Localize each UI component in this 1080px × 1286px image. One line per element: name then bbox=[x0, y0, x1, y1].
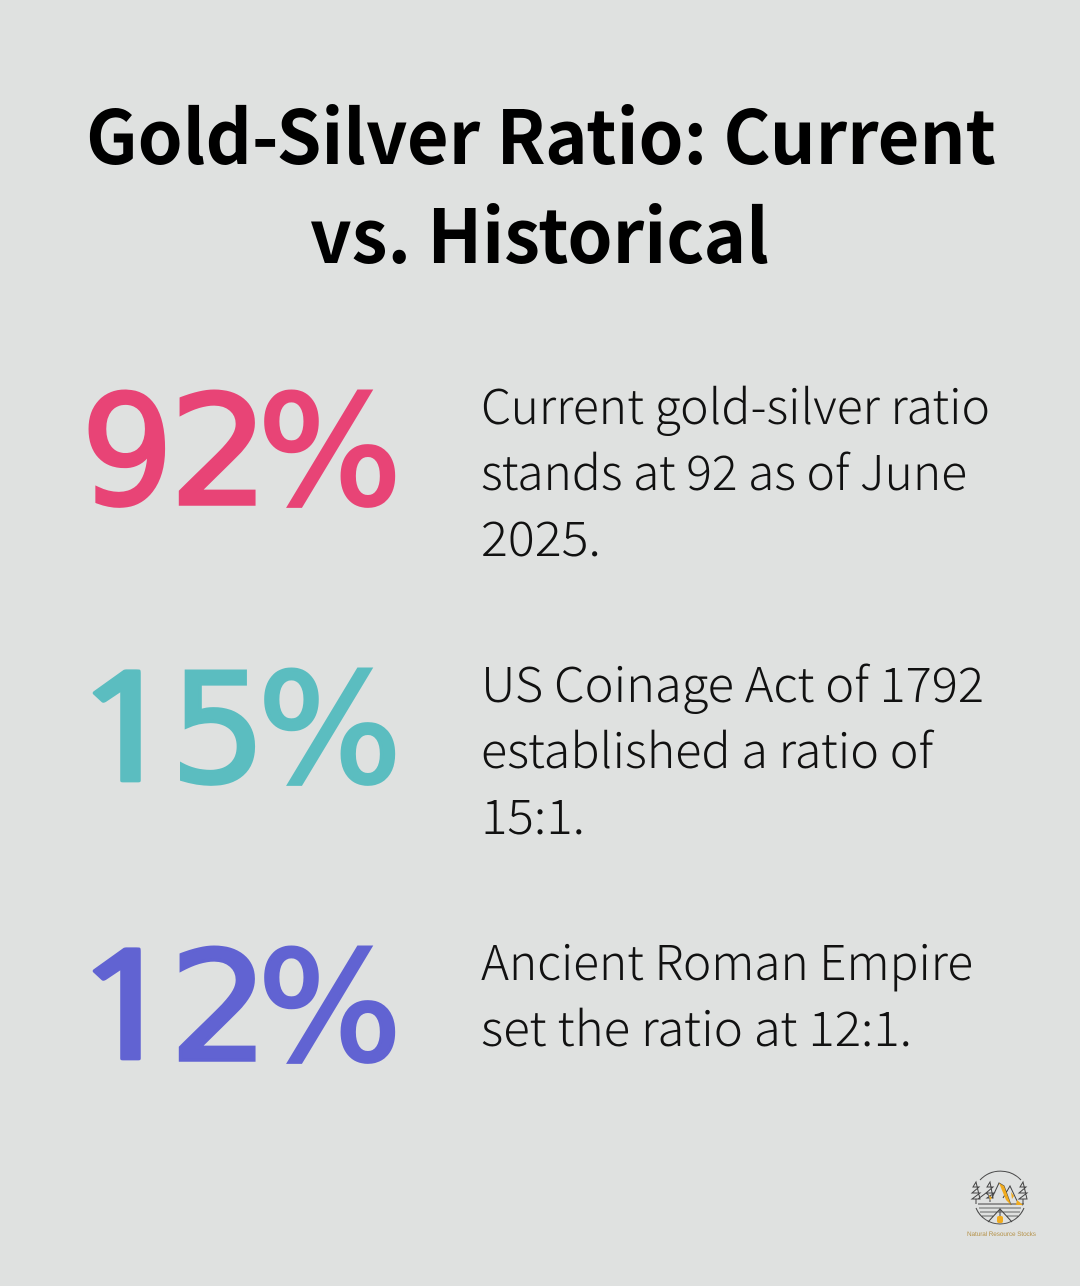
stat: 92%: % bbox=[258, 363, 402, 540]
stat: 15%: 5 bbox=[170, 641, 267, 818]
text: roman empire bbox=[481, 924, 973, 1060]
logo: Natural Resource Stocks: Natural Resource Stocks bbox=[967, 1231, 1036, 1238]
title bbox=[86, 79, 996, 285]
text: coinage act bbox=[481, 646, 984, 848]
stat: 92% bbox=[81, 363, 402, 541]
text: current ratio bbox=[481, 368, 990, 570]
title: Gold-Silver Ratio: Current bbox=[86, 79, 996, 186]
logo: Natural Resource Stocks bbox=[967, 1171, 1036, 1238]
stat: 12%: % bbox=[258, 919, 402, 1096]
text: roman empire: set the ratio at 12:1. bbox=[481, 990, 912, 1060]
stat: 15%: 1 bbox=[68, 657, 184, 805]
stat: 12%: 2 bbox=[169, 919, 270, 1096]
text: current ratio: Current gold-silver ratio bbox=[481, 368, 990, 438]
stat: 92%: 2 bbox=[169, 363, 270, 540]
title: vs. Historical bbox=[310, 178, 769, 285]
text: current ratio: stands at 92 as of June bbox=[481, 434, 967, 504]
stat: 12%: 1 bbox=[68, 935, 184, 1083]
text: coinage act: established a ratio of bbox=[481, 712, 935, 782]
text: current ratio: 2025. bbox=[481, 500, 601, 570]
stat: 12% bbox=[68, 919, 402, 1096]
text: coinage act: 15:1. bbox=[481, 778, 585, 848]
stat: 15%: % bbox=[258, 641, 402, 818]
text: coinage act: US Coinage Act of 1792 bbox=[481, 646, 984, 716]
text: roman empire: Ancient Roman Empire bbox=[481, 924, 973, 994]
stat: 92%: 9 bbox=[81, 364, 174, 541]
stat: 15% bbox=[68, 641, 402, 818]
